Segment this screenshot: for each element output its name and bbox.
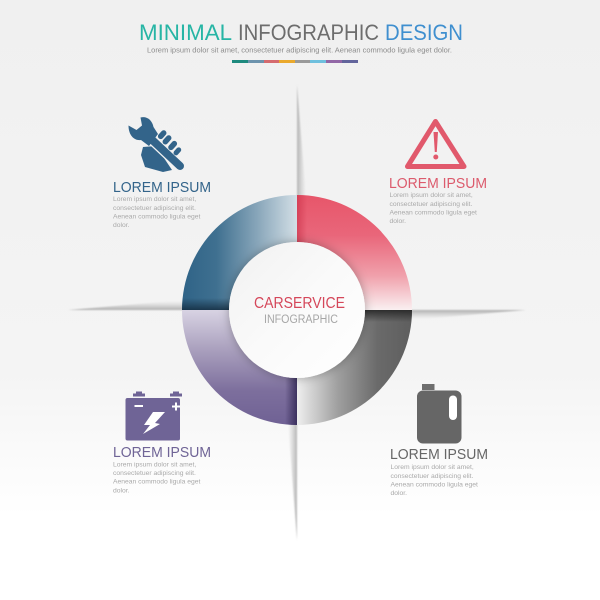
panel: battery — [113, 392, 211, 494]
title — [139, 20, 463, 45]
body text: dolor. — [113, 222, 130, 229]
panel: oil can — [390, 384, 488, 497]
ring segment: grey — [297, 310, 412, 425]
body text: dolor. — [390, 490, 407, 497]
ring segment: blue — [182, 195, 297, 310]
title: MINIMAL — [139, 20, 232, 45]
body text: consectetuer adipiscing elit. — [390, 201, 473, 208]
ring segment: red — [297, 195, 412, 310]
body text: consectetuer adipiscing elit. — [113, 205, 196, 212]
icon: oil jug — [417, 384, 462, 444]
body text: consectetuer adipiscing elit. — [390, 473, 474, 480]
body text: Aenean commodo ligula eget — [390, 210, 477, 216]
heading: LOREM IPSUM — [113, 445, 211, 461]
title: INFOGRAPHIC — [238, 20, 379, 45]
body text: Lorem ipsum dolor sit amet, — [113, 196, 196, 203]
title: DESIGN — [385, 20, 463, 45]
body text: consectetuer adipiscing elit. — [113, 470, 196, 477]
body text: dolor. — [390, 218, 406, 225]
icon: battery — [126, 392, 182, 440]
centre circle — [229, 242, 365, 378]
ring segment: purple — [182, 310, 297, 425]
seam shadows — [182, 195, 412, 426]
body text: dolor. — [113, 488, 130, 494]
fold shadows — [68, 85, 526, 540]
centre heading: CARSERVICE — [254, 295, 345, 312]
colour bar — [232, 60, 358, 63]
panel: warning — [389, 122, 487, 225]
icon: warning triangle — [408, 122, 464, 166]
centre subheading: INFOGRAPHIC — [264, 314, 338, 326]
body text: Lorem ipsum dolor sit amet, — [390, 464, 474, 471]
body text: Aenean commodo ligula eget — [113, 214, 201, 220]
ring chart — [182, 195, 412, 426]
heading: LOREM IPSUM — [390, 447, 488, 463]
panel: wrench — [113, 117, 211, 229]
body text: Lorem ipsum dolor sit amet, — [113, 462, 196, 468]
heading: LOREM IPSUM — [113, 180, 211, 196]
icon: wrench and fist — [128, 117, 182, 172]
subtitle: Lorem ipsum dolor sit amet, consectetuer adipiscing elit. Aenean commodo ligula eget dolor. — [147, 46, 452, 54]
body text: Aenean commodo ligula eget — [113, 478, 201, 486]
body text: Lorem ipsum dolor sit amet, — [390, 192, 473, 199]
body text: Aenean commodo ligula eget — [390, 482, 478, 488]
heading: LOREM IPSUM — [389, 176, 487, 192]
